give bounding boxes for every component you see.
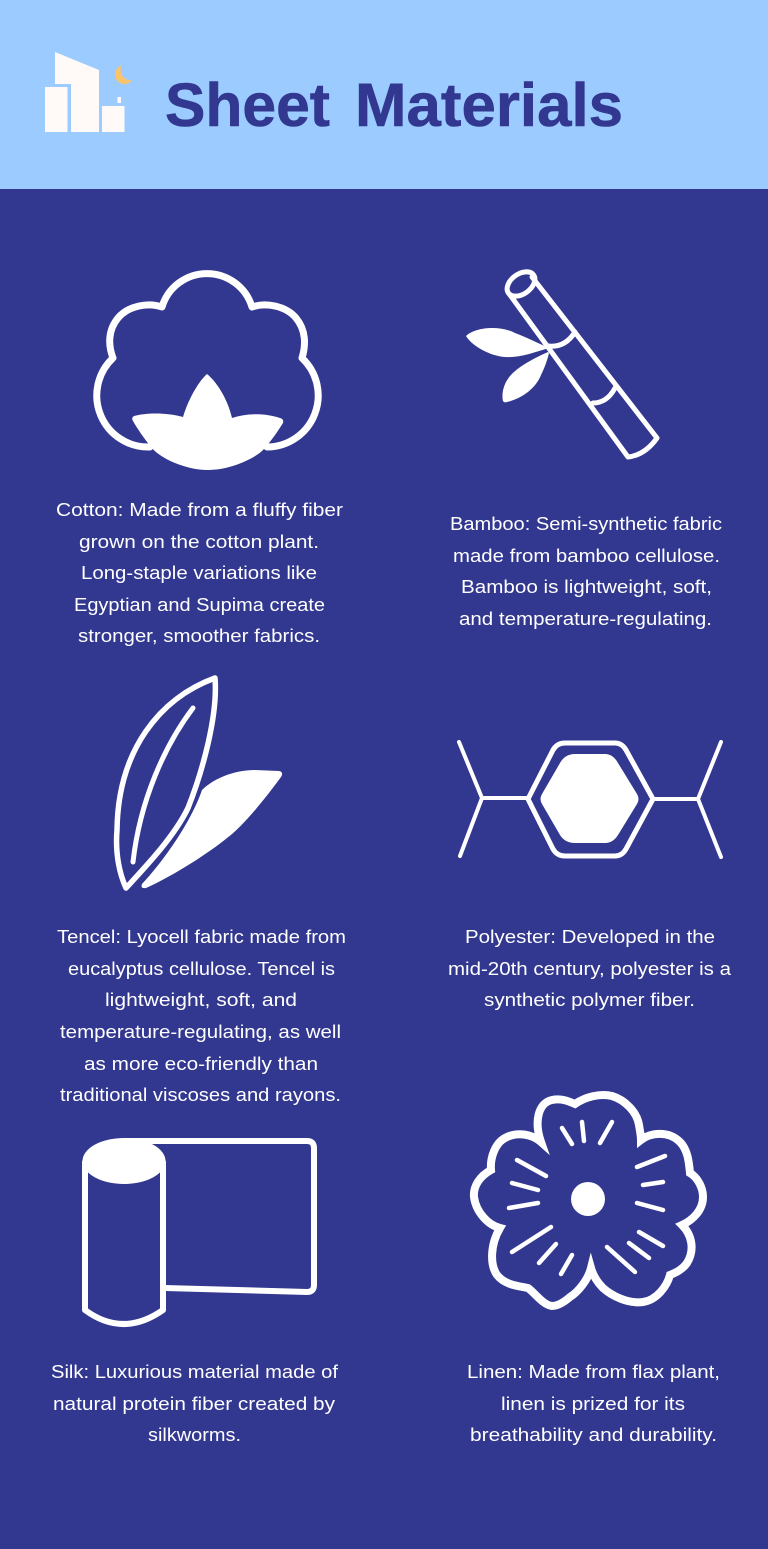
text: tencel description: as more eco-friendly than xyxy=(84,1054,318,1074)
text: polyester description: Polyester: Developed in the xyxy=(465,927,715,947)
icon: cotton boll xyxy=(97,274,318,470)
icon: bamboo stalk with leaves xyxy=(466,267,657,457)
text: polyester description: mid-20th century, polyester is a xyxy=(448,959,732,979)
panel: tencel xyxy=(57,678,346,1105)
title: Materials xyxy=(355,71,623,139)
panel: cotton xyxy=(56,274,343,646)
text: bamboo description: and temperature-regulating. xyxy=(459,609,712,629)
icon: flax flower xyxy=(474,1095,703,1306)
text: bamboo description: made from bamboo cellulose. xyxy=(453,546,720,566)
panel: linen xyxy=(467,1095,720,1445)
text: silk description: Silk: Luxurious material made of xyxy=(51,1362,339,1382)
text: bamboo description: Bamboo is lightweight, soft, xyxy=(461,577,712,597)
icon: polymer molecule xyxy=(459,742,721,857)
text: cotton description: grown on the cotton plant. xyxy=(79,532,319,552)
text: linen description: linen is prized for its xyxy=(501,1394,685,1414)
text: cotton description: Long-staple variations like xyxy=(81,563,317,583)
text: silk description: silkworms. xyxy=(148,1425,241,1445)
text: tencel description: Tencel: Lyocell fabric made from xyxy=(57,927,346,947)
header band xyxy=(0,0,768,189)
text: polyester description: synthetic polymer fiber. xyxy=(484,990,695,1010)
text: tencel description: traditional viscoses and rayons. xyxy=(60,1085,341,1105)
icon: fabric roll xyxy=(82,1138,314,1324)
text: polyester description xyxy=(448,927,732,1010)
panel: polyester xyxy=(448,742,732,1010)
title: Sheet xyxy=(165,71,330,139)
text: bamboo description xyxy=(450,514,722,629)
text: cotton description xyxy=(56,500,343,646)
icon: city skyline logo with moon xyxy=(45,52,132,132)
text: tencel description: lightweight, soft, and xyxy=(105,990,297,1010)
text: tencel description: temperature-regulating, as well xyxy=(60,1022,341,1042)
text: linen description xyxy=(467,1362,720,1445)
text: silk description xyxy=(51,1362,339,1445)
panel: silk xyxy=(51,1138,339,1445)
text: linen description: Linen: Made from flax plant, xyxy=(467,1362,720,1382)
text: bamboo description: Bamboo: Semi-synthetic fabric xyxy=(450,514,722,534)
text: cotton description: stronger, smoother fabrics. xyxy=(78,626,320,646)
text: silk description: natural protein fiber created by xyxy=(53,1394,335,1414)
text: cotton description: Cotton: Made from a fluffy fiber xyxy=(56,500,343,520)
panel: bamboo xyxy=(450,267,722,629)
text: cotton description: Egyptian and Supima create xyxy=(74,595,325,615)
icon: eucalyptus leaves xyxy=(117,678,282,888)
text: linen description: breathability and durability. xyxy=(470,1425,717,1445)
text: tencel description xyxy=(57,927,346,1105)
text: tencel description: eucalyptus cellulose. Tencel is xyxy=(68,959,335,979)
